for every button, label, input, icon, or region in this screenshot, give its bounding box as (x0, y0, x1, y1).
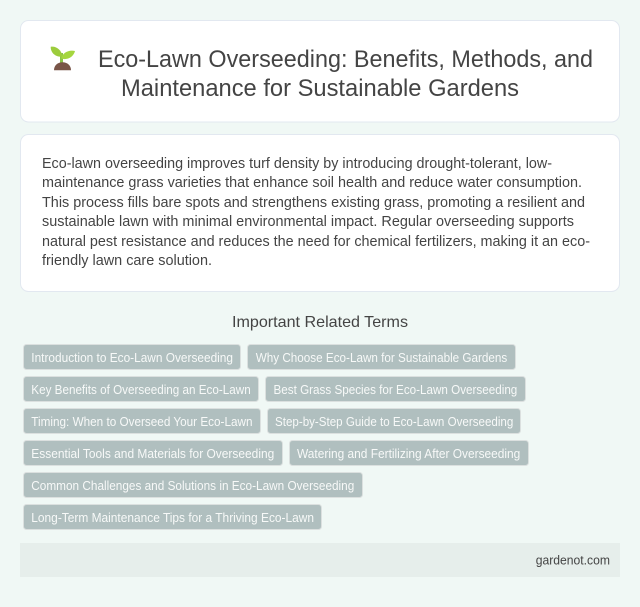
tag: best grass species: Best Grass Species for Eco-Lawn Overseeding (274, 382, 517, 397)
heading: title: Eco-Lawn Overseeding: Benefits, Methods, and (98, 46, 593, 73)
tag: common challenges (24, 472, 362, 498)
tag: essential tools: Essential Tools and Materials for Overseeding (31, 446, 274, 461)
panel: description card (20, 134, 620, 292)
tag: step-by-step (268, 408, 520, 434)
tag: common challenges: Common Challenges and Solutions in Eco-Lawn Overseeding (31, 478, 354, 493)
text block: description: sustainable lawn with minimal environmental impact. Regular overseeding supports (42, 213, 574, 230)
footer (20, 543, 620, 577)
tag: introduction (24, 344, 240, 370)
tag: best grass species (266, 376, 526, 402)
tag: essential tools (24, 440, 282, 466)
tag: introduction: Introduction to Eco-Lawn Overseeding (31, 350, 233, 365)
tag: step-by-step: Step-by-Step Guide to Eco-Lawn Overseeding (275, 414, 513, 429)
tag: timing (24, 408, 260, 434)
tag: key benefits (24, 376, 258, 402)
heading: title (98, 46, 593, 102)
panel: title card (20, 20, 620, 122)
text block: description: natural pest resistance and reduces the need for chemical fertilizers, making it an eco- (42, 233, 590, 250)
tag list: related terms (24, 344, 528, 530)
tag: long-term maintenance (24, 504, 322, 530)
text block: description: This process fills bare spots and strengthens existing grass, promoting a resilient and (42, 194, 585, 211)
tag: why choose (248, 344, 516, 370)
tag: watering and fertilizing: Watering and Fertilizing After Overseeding (297, 446, 520, 461)
text block: description (42, 155, 590, 269)
tag: long-term maintenance: Long-Term Maintenance Tips for a Thriving Eco-Lawn (31, 510, 314, 525)
footer: site name: gardenot.com (536, 552, 610, 567)
text block: description: maintenance grass varieties that enhance soil health and reduce water consumption. (42, 174, 582, 191)
tag: watering and fertilizing (290, 440, 528, 466)
heading: title: Maintenance for Sustainable Gardens (121, 75, 519, 102)
tag: key benefits: Key Benefits of Overseeding an Eco-Lawn (31, 382, 251, 397)
icon: seedling (51, 47, 75, 70)
text block: description: Eco-lawn overseeding improves turf density by introducing drought-tolerant, low- (42, 155, 552, 172)
heading: important related terms: Important Related Terms (232, 314, 408, 331)
tag: timing: Timing: When to Overseed Your Eco-Lawn (31, 414, 252, 429)
tag: why choose: Why Choose Eco-Lawn for Sustainable Gardens (256, 350, 507, 365)
text block: description: friendly lawn care solution. (42, 252, 212, 269)
